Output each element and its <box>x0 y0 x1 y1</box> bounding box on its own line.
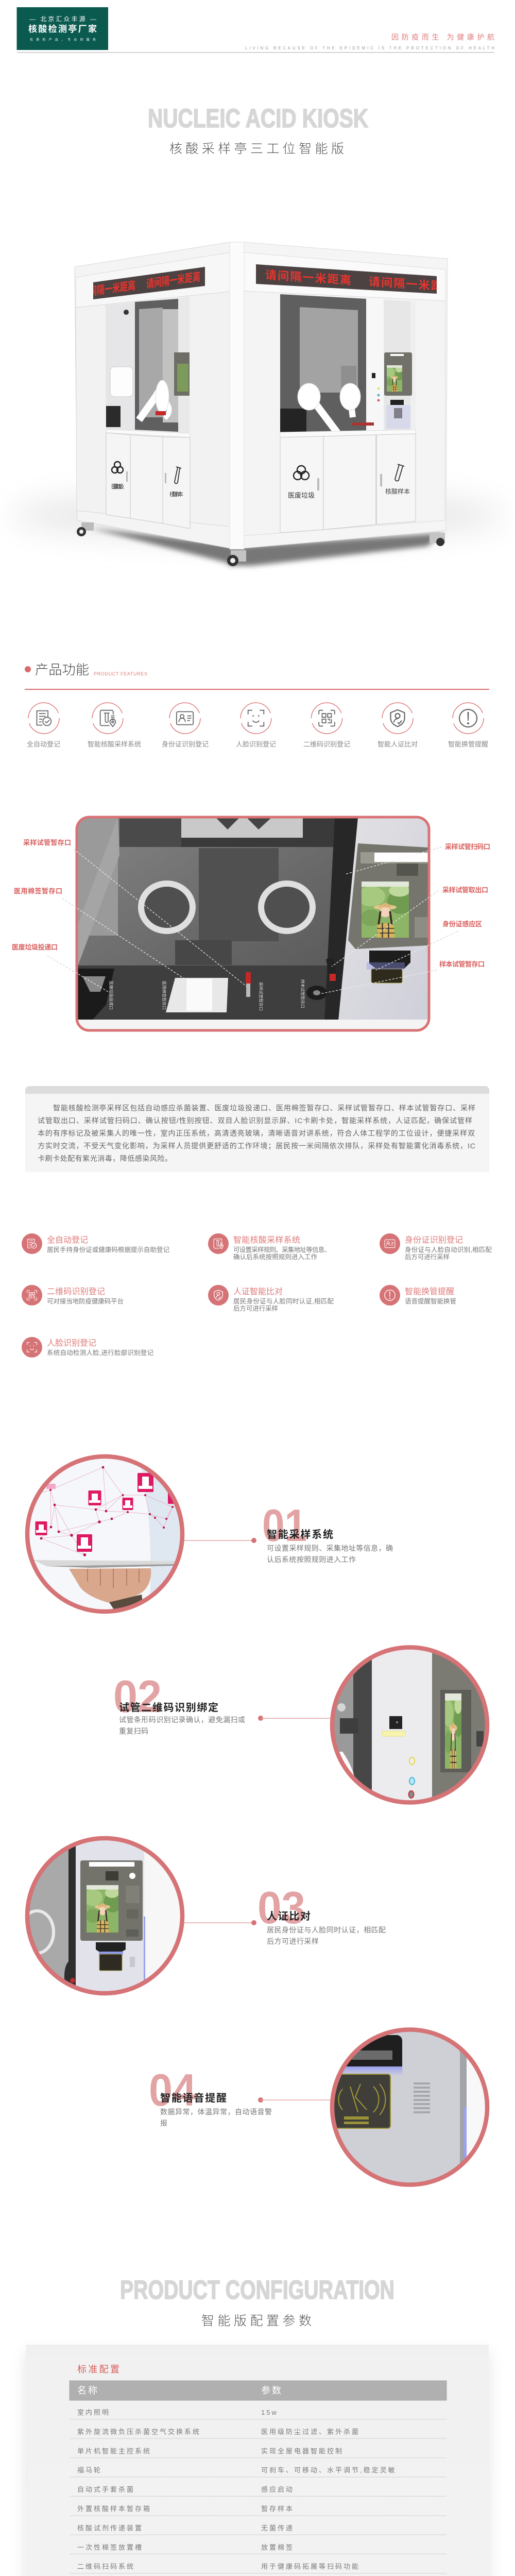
description box <box>25 1086 489 1172</box>
feature 02: number and text <box>113 1671 330 1735</box>
feature: 身份证识别登记 <box>162 703 209 748</box>
row 6 <box>70 2505 447 2516</box>
feature 04: number and text <box>149 2064 330 2127</box>
feature 01: number and text: 智能采样系统 <box>267 1528 333 1540</box>
item: 身份证识别登记: 身份证识别登记 <box>405 1235 463 1245</box>
panel: sampling window detail: 采样试管暂存口 <box>259 982 264 1011</box>
right cabinet doors <box>280 436 323 533</box>
waste slot <box>77 969 114 1020</box>
row 8: 一次性棉签放置槽 <box>77 2544 143 2551</box>
header logo <box>16 7 108 50</box>
hand <box>69 1568 151 1603</box>
item: 智能换管提醒: 智能换管提醒 <box>405 1287 454 1296</box>
feature: 智能换管提醒: 智能换管提醒 <box>448 740 488 748</box>
item: 智能核酸采样系统: 确认后系统按照规则进入工作 <box>233 1253 317 1261</box>
left cabinet doors <box>106 433 130 518</box>
table: standard configuration: 标准配置 <box>77 2364 119 2375</box>
main title: NUCLEIC ACID KIOSK <box>148 104 368 133</box>
wheels <box>77 522 445 566</box>
black cup <box>306 986 327 1000</box>
item: 智能核酸采样系统: 可设置采样规则、采集地址等信息、 <box>233 1246 331 1253</box>
callouts: window labels and leader lines: 采样试管取出口 <box>442 886 488 894</box>
item: 人证智能比对: 居民身份证与人脸同时认证,相匹配 <box>233 1297 334 1305</box>
feature: 全自动登记: 全自动登记 <box>27 740 60 748</box>
table: standard configuration <box>70 2364 447 2576</box>
item: 智能核酸采样系统 <box>208 1233 331 1261</box>
slogan: LIVING BECAUSE OF THE EPIDEMIC IS THE PROTECTION OF HEALTH <box>245 46 494 50</box>
row 9: 用于健康码拓展等扫码功能 <box>261 2563 360 2570</box>
LED right <box>256 264 437 294</box>
row 4 <box>70 2466 447 2478</box>
description box: 本的有序标记及被采集人的唯一性，室内正压系统，高清透亮玻璃，清晰语音对讲系统，符合人体工程学的工位设计，便捷采样双 <box>38 1129 475 1138</box>
description box: 智能核酸检测亭采样区包括自动感应杀菌装置、医废垃圾投递口、医用棉签暂存口、采样试管暂存口、样本试管暂存口、采样 <box>53 1104 475 1112</box>
feature: 智能人证比对: 智能人证比对 <box>377 740 418 748</box>
feature 03: number and text: 人证比对 <box>267 1910 311 1922</box>
callouts: window labels and leader lines: 采样试管暂存口 <box>23 839 71 846</box>
row 5 <box>70 2486 447 2497</box>
tray <box>166 978 228 1012</box>
left window <box>106 297 190 433</box>
feature 03: number and text <box>184 1882 386 1945</box>
item: 人证智能比对: 人证智能比对 <box>233 1287 283 1296</box>
config title <box>120 2275 394 2328</box>
item: 人证智能比对: 后方可进行采样 <box>233 1304 278 1312</box>
kiosk product illustration: 请间隔一米距离 <box>81 279 135 299</box>
kiosk product illustration: 请间隔一米距离 <box>265 268 351 287</box>
item: 二维码识别登记: 二维码识别登记 <box>47 1287 105 1296</box>
header logo: 优质的产品，专业的服务 <box>30 38 96 42</box>
item: 人证智能比对 <box>208 1285 334 1312</box>
feature: 全自动登记 <box>27 703 60 748</box>
callouts: window labels and leader lines: 样本试管暂存口 <box>439 960 485 968</box>
biohazard marks <box>112 462 309 480</box>
kiosk product illustration: 核酸样本 <box>169 490 183 498</box>
feature 01: photo circle <box>25 1454 185 1614</box>
LED left <box>93 267 205 299</box>
item: 人脸识别登记 <box>22 1337 153 1358</box>
slogan <box>17 33 494 53</box>
door handles <box>126 471 382 490</box>
item: 人脸识别登记: 系统自动检测人脸,进行脸部识别登记 <box>47 1349 153 1357</box>
row 9: 二维码扫码系统 <box>77 2563 135 2570</box>
row 6: 外置核酸样本暂存箱 <box>77 2505 151 2513</box>
feature 02: photo circle <box>330 1645 490 1805</box>
item: 智能换管提醒 <box>380 1285 456 1306</box>
row 3: 单片机智能主控系统 <box>77 2447 151 2455</box>
feature: 二维码识别登记 <box>303 703 350 748</box>
feature: 人脸识别登记: 人脸识别登记 <box>236 740 276 748</box>
panel: sampling window detail: 医用棉签暂存口 <box>162 981 167 1010</box>
item: 身份证识别登记: 身份证与人脸自动识别,相匹配 <box>405 1246 492 1253</box>
test tube marks <box>175 464 404 484</box>
row 4: 可刹车、可移动、水平调节,稳定灵敏 <box>261 2466 397 2474</box>
feature 03: number and text: 居民身份证与人脸同时认证，相匹配 <box>267 1926 386 1934</box>
feature list <box>22 1233 492 1358</box>
left face <box>75 242 230 548</box>
feature 01: number and text: 认后系统按照规则进入工作 <box>267 1555 356 1564</box>
row 3 <box>70 2447 447 2458</box>
feature 02: number and text: 试管条形码识别记录确认，避免漏扫或 <box>119 1716 245 1724</box>
item: 人脸识别登记: 人脸识别登记 <box>47 1338 96 1348</box>
panel: config card <box>26 2345 489 2576</box>
item: 全自动登记: 全自动登记 <box>47 1235 88 1245</box>
row 1 <box>70 2409 447 2419</box>
row 8: 放置棉签 <box>261 2544 294 2551</box>
feature 04: number and text: 报 <box>160 2119 167 2127</box>
feature 03: photo circle <box>21 1836 185 1996</box>
kiosk product illustration: 请间隔一米距离 <box>369 275 455 294</box>
header logo: 核酸检测亭厂家 <box>28 24 97 34</box>
feature: 二维码识别登记: 二维码识别登记 <box>303 740 350 748</box>
feature: 智能核酸采样系统: 智能核酸采样系统 <box>88 740 141 748</box>
item: 身份证识别登记: 后方可进行采样 <box>405 1253 450 1261</box>
kiosk product illustration: 核酸样本 <box>385 487 410 495</box>
callouts: window labels and leader lines: 医废垃圾投递口 <box>12 943 58 951</box>
feature: 智能核酸采样系统 <box>88 703 141 748</box>
heading: product features <box>25 662 489 690</box>
row 7 <box>70 2524 447 2535</box>
feature 04: number and text: 数据异常，体温异常，自动语音警 <box>160 2108 272 2116</box>
heading: product features: PRODUCT FEATURES <box>94 671 147 676</box>
row 1: 15w <box>261 2409 278 2416</box>
tube <box>246 972 251 984</box>
item: 智能换管提醒: 语音提醒智能换管 <box>405 1297 456 1305</box>
table: standard configuration: 参数 <box>261 2385 283 2396</box>
header logo: — 北京汇众丰源 — <box>29 15 96 23</box>
row 7: 核酸试剂传递装置 <box>77 2524 143 2532</box>
row 3: 实现全屋电器智能控制 <box>261 2447 344 2455</box>
feature 04: photo circle <box>330 2027 490 2187</box>
row 4: 福马轮 <box>77 2466 102 2474</box>
feature 01: number and text: 可设置采样规则、采集地址等信息，确 <box>267 1544 393 1552</box>
kiosk product illustration <box>10 242 505 566</box>
feature 01: number and text <box>184 1500 393 1564</box>
callouts: window labels and leader lines: 身份证感应区 <box>442 920 482 928</box>
feature: 人脸识别登记 <box>236 703 276 748</box>
row 5: 感应启动 <box>261 2486 294 2494</box>
config title: 智能版配置参数 <box>201 2314 312 2328</box>
feature: 智能换管提醒 <box>448 703 488 748</box>
description box: 卡刷卡处配有紫光消毒，降低感染风险。 <box>38 1154 172 1162</box>
row 2 <box>70 2428 447 2439</box>
callouts: window labels and leader lines: 采样试管扫码口 <box>445 843 490 851</box>
item: 身份证识别登记 <box>380 1233 492 1261</box>
feature 04: number and text: 智能语音提醒 <box>160 2092 227 2104</box>
kiosk product illustration: 医废垃圾 <box>288 492 315 499</box>
row 9 <box>70 2563 447 2574</box>
central post <box>230 242 244 549</box>
item: 全自动登记: 居民手持身份证或健康码根据提示自助登记 <box>47 1246 169 1253</box>
kiosk product illustration: 医废垃圾 <box>111 483 124 490</box>
feature 02: number and text: 重复扫码 <box>119 1727 148 1735</box>
callouts: window labels and leader lines <box>12 839 490 994</box>
feature 02: number and text: 02 <box>113 1671 162 1722</box>
row 1: 室内照明 <box>77 2409 110 2416</box>
row 2: 医用级防尘过滤、紫外杀菌 <box>261 2428 360 2435</box>
feature 01: number and text: 01 <box>262 1500 307 1551</box>
config title: PRODUCT CONFIGURATION <box>120 2275 394 2304</box>
row 2: 紫外旋流微负压杀菌空气交换系统 <box>77 2428 201 2435</box>
vertical labels: 医废垃圾投递口 <box>109 981 114 1010</box>
item: 全自动登记 <box>22 1233 169 1254</box>
slogan: 因防疫而生 为健康护航 <box>391 33 494 41</box>
item: 二维码识别登记: 可对接当地防疫健康码平台 <box>47 1297 124 1305</box>
feature: 身份证识别登记: 身份证识别登记 <box>162 740 209 748</box>
callouts: window labels and leader lines: 医用棉签暂存口 <box>14 887 62 895</box>
feature 04: number and text: 04 <box>149 2064 196 2115</box>
terminal <box>348 843 428 949</box>
item: 智能核酸采样系统: 智能核酸采样系统 <box>233 1235 300 1245</box>
description box: 方实时交流，不受天气变化影响，为采样人员提供更舒适的工作环境；居民按一米间隔依次排队，采样处有智能雾化消毒系统，IC <box>38 1142 475 1150</box>
right window <box>280 294 416 432</box>
feature: 智能人证比对 <box>377 703 418 748</box>
main title <box>148 104 368 156</box>
main title: 核酸采样亭三工位智能版 <box>169 142 344 156</box>
row 6: 暂存样本 <box>261 2505 294 2513</box>
right face <box>244 242 448 548</box>
feature 02: number and text: 试管二维码识别绑定 <box>119 1701 218 1714</box>
item: 二维码识别登记 <box>22 1285 124 1306</box>
tablet <box>34 1560 175 1566</box>
panel: sampling window detail: 样本试管暂存口 <box>300 979 305 1008</box>
table: standard configuration: 名称 <box>77 2385 99 2396</box>
description box: 试管取出口、采样试管扫码口、确认按钮/性别按钮、双目人脸识别显示屏、IC卡刷卡处，智能采样系统，人证匹配，确保试管样 <box>38 1116 472 1125</box>
row 7: 无菌传递 <box>261 2524 294 2532</box>
heading: product features: 产品功能 <box>35 662 89 677</box>
icon row: product features <box>27 703 488 748</box>
row 8 <box>70 2544 447 2554</box>
kiosk product illustration: 请间隔一米距离 <box>146 270 200 291</box>
panel: sampling window detail <box>77 817 429 1030</box>
row 5: 自动式手套杀菌 <box>77 2486 135 2494</box>
feature 03: number and text: 03 <box>258 1882 305 1933</box>
rings <box>141 884 193 931</box>
feature 03: number and text: 后方可进行采样 <box>267 1937 319 1945</box>
